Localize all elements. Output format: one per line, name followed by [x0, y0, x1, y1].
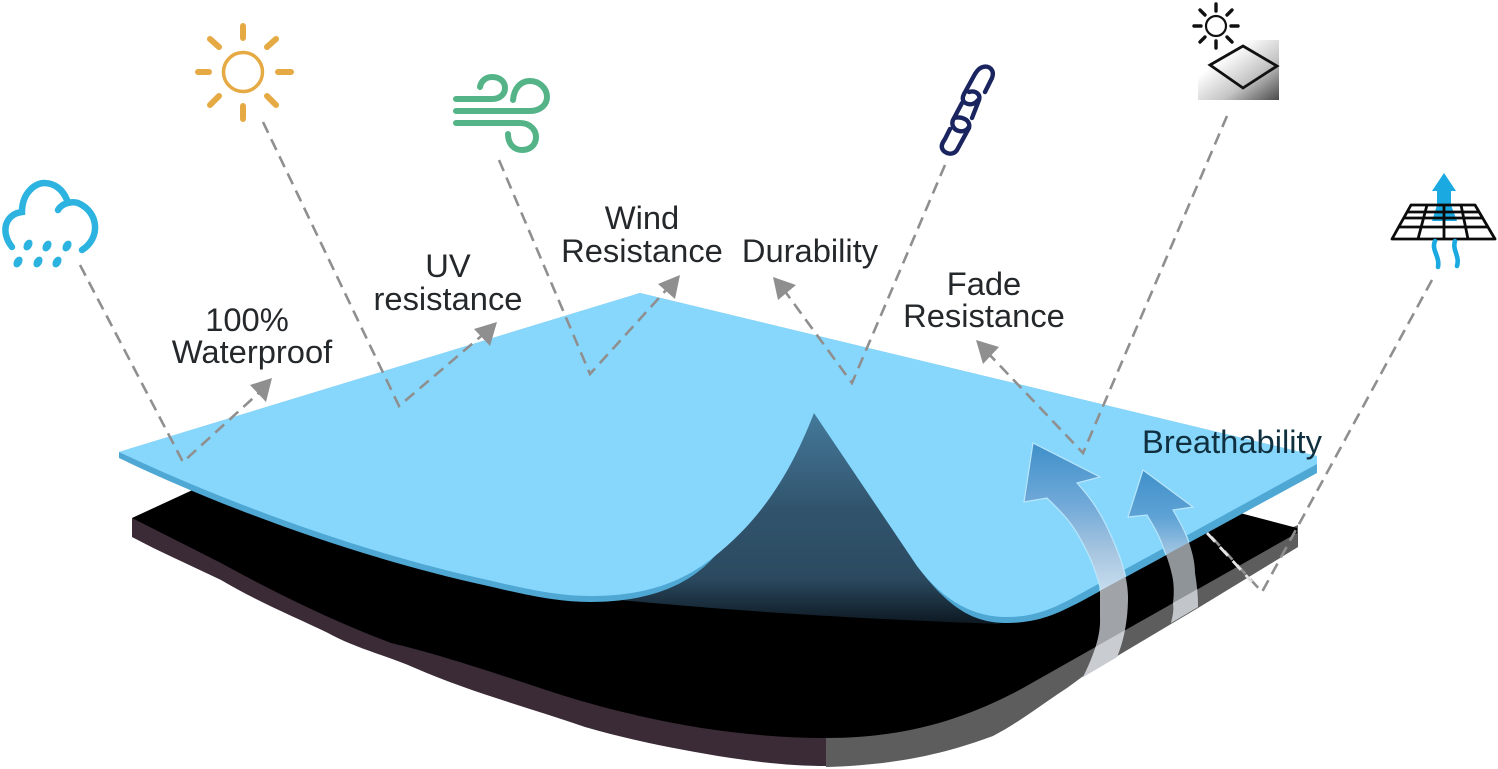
- label: Wind Resistance: Resistance: [561, 232, 723, 269]
- label: UV resistance: resistance: [374, 280, 522, 317]
- icon: breathable mesh with arrow: [1392, 173, 1495, 267]
- label: Fade Resistance: Fade: [947, 265, 1021, 302]
- label: Fade Resistance: Resistance: [903, 297, 1065, 334]
- light dashes on the black layer: [1207, 533, 1252, 582]
- leader line: Breathability: [1192, 280, 1432, 592]
- icon: wind: [456, 77, 547, 150]
- leader line: Fade Resistance: [976, 116, 1227, 453]
- leader line: 100% Waterproof: [80, 265, 272, 462]
- leader line: UV resistance: [263, 122, 497, 406]
- blue top sheet with curled corner: [119, 293, 1317, 624]
- label: Durability: Durability: [742, 232, 879, 269]
- airflow arrow: large: [1024, 443, 1128, 677]
- label: 100% Waterproof: Waterproof: [172, 333, 333, 370]
- icon: rain cloud: [5, 183, 95, 269]
- label: Wind Resistance: Wind: [605, 199, 679, 236]
- label: 100% Waterproof: 100%: [205, 301, 289, 338]
- shaded underside of the curl: [600, 413, 1000, 624]
- icon: chain: [942, 67, 993, 154]
- leader line: Durability: [773, 165, 945, 383]
- base layer: black sheet with edge: [132, 469, 1298, 767]
- sheet edge thickness: [119, 293, 1317, 623]
- sheet top surface: [119, 293, 1317, 617]
- icon: sun over fabric swatch: [1194, 4, 1279, 100]
- leader line: Wind Resistance: [499, 160, 680, 374]
- airflow arrow: small: [1128, 470, 1198, 623]
- icon: orange sun: [198, 26, 291, 119]
- label: UV resistance: UV: [425, 247, 471, 284]
- label: Breathability: Breathability: [1142, 423, 1323, 460]
